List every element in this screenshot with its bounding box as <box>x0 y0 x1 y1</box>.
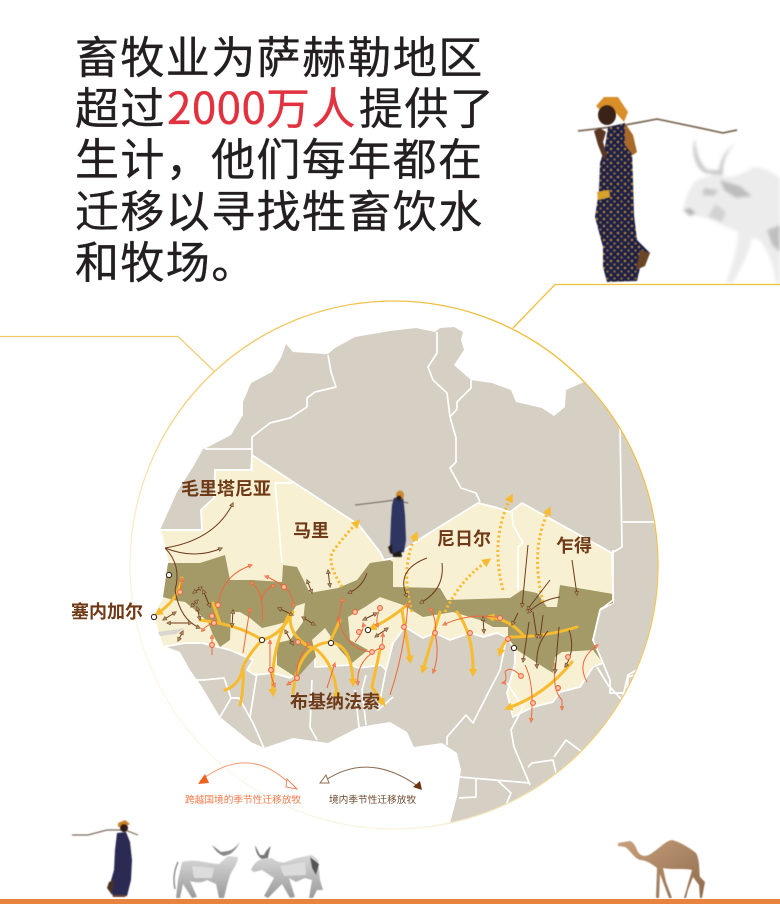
country label: Niger: 尼日尔 <box>437 525 491 551</box>
title line 5: 和牧场。 <box>75 227 257 291</box>
country borders <box>160 332 665 810</box>
title line 2 with red highlight: 超过 <box>75 73 166 137</box>
orange ground bar <box>0 899 780 904</box>
map of the Sahel region <box>150 327 658 822</box>
photo: camel <box>618 840 705 898</box>
coastal grey strip <box>158 628 185 636</box>
title line 3: 他们每年都在 <box>211 124 483 188</box>
dotted yellow routes <box>331 499 548 612</box>
country label: Mali: 马里 <box>293 517 329 543</box>
photo: herder woman with stick <box>578 97 737 282</box>
water and market nodes <box>151 572 570 705</box>
country label: Senegal: 塞内加尔 <box>71 598 143 624</box>
pale Sahel countries <box>153 455 613 717</box>
yellow callout line left <box>0 336 215 372</box>
photo: white zebu cow, upper right <box>683 138 780 284</box>
title line 1: 畜牧业为萨赫勒地区 <box>75 22 484 86</box>
legend: domestic transhumance: 境内季节性迁移放牧 <box>329 792 416 806</box>
country label: Chad: 乍得 <box>556 532 592 558</box>
title line 2 with red highlight: 2000 <box>167 73 266 137</box>
title line 2 with red highlight: 万人 <box>266 73 357 137</box>
photo: grey cow facing right <box>174 842 240 898</box>
land mass <box>160 327 658 822</box>
legend: domestic transhumance <box>320 767 422 806</box>
title line 4: 迁移以寻找牲畜饮水 <box>75 176 484 240</box>
country label: Burkina Faso: 布基纳法索 <box>290 688 380 714</box>
legend: cross-border transhumance: 跨越国境的季节性迁移放牧 <box>185 792 302 806</box>
herder figure on map <box>355 490 408 557</box>
yellow callout line upper right <box>513 284 780 328</box>
title <box>75 22 495 291</box>
title line 2 with red highlight: 提供了 <box>359 73 495 137</box>
photo: grey cow facing left <box>251 845 323 898</box>
country label: Mauritania: 毛里塔尼亚 <box>181 475 271 501</box>
map circle outline <box>130 301 658 829</box>
title line 3: 生计， <box>75 124 211 188</box>
legend: cross-border transhumance <box>185 763 302 806</box>
orange cross-border routes <box>180 565 598 722</box>
brown internal routes <box>163 503 577 673</box>
olive pastoral zone <box>163 555 613 678</box>
photo: herder woman bottom left <box>72 820 138 897</box>
thick yellow transhumance routes <box>158 578 577 708</box>
